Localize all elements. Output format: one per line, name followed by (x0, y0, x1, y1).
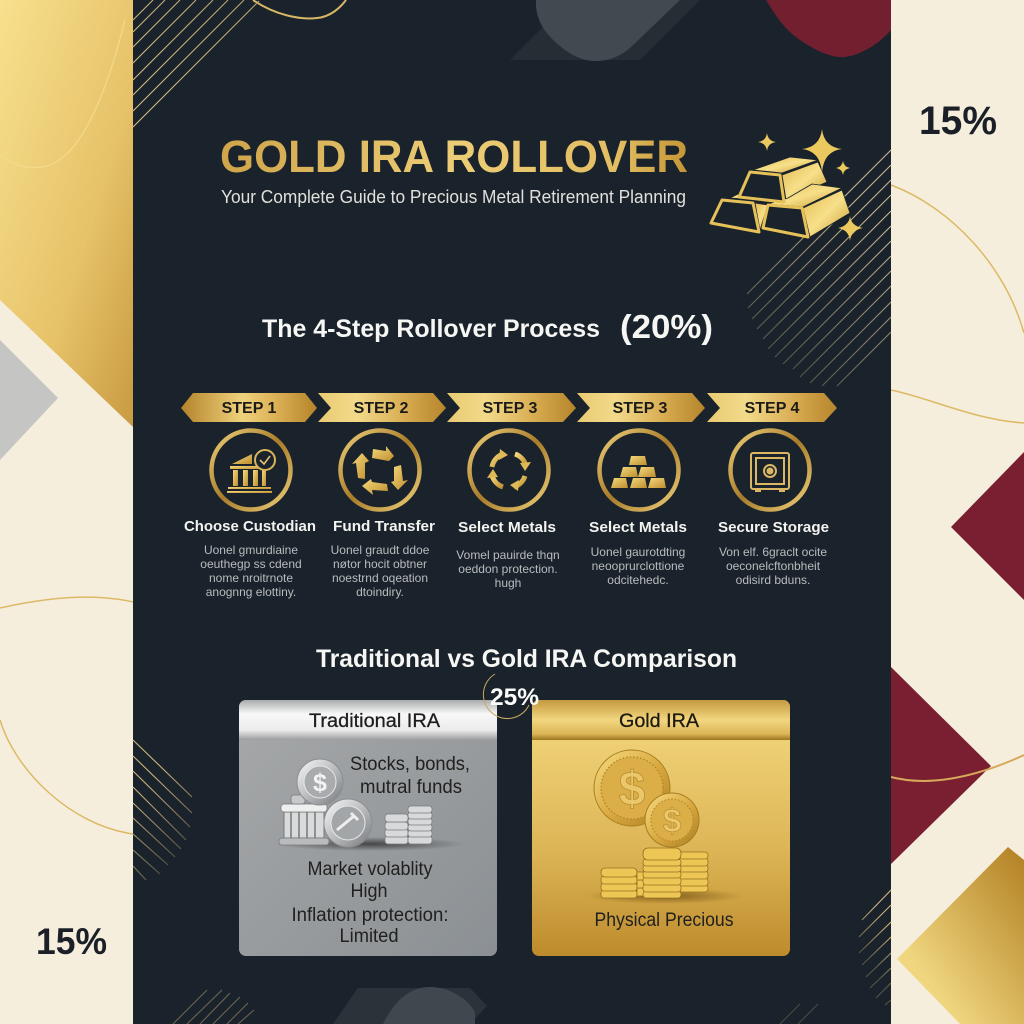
step 4 description: oeconelcftonbheit (726, 559, 821, 573)
step 3 title: Select Metals (458, 519, 556, 536)
step 1 description: anognng elottiny. (206, 585, 296, 599)
step 2 column (318, 393, 446, 599)
step 3 description: hugh (495, 576, 521, 590)
step 4 banner (707, 393, 837, 422)
step 1 description: nome nroitrnote (209, 571, 293, 585)
step 1 banner (181, 393, 317, 422)
step 3 banner (447, 393, 576, 422)
icon: bank with check (212, 430, 290, 510)
step 1 description: Uonel gmurdiaine (204, 543, 298, 557)
step 1 description (200, 543, 302, 599)
icon: transfer arrows (340, 430, 420, 510)
step 3b description (591, 545, 685, 587)
card text: volatility and inflation: Market volablity (308, 859, 433, 880)
percent label: top right 15%: 15% (919, 99, 997, 143)
card text: physical precious: Physical Precious (594, 910, 734, 931)
heading: comparison: Traditional vs Gold IRA Comparison (316, 645, 737, 673)
step 3b description: neooprurclottione (592, 559, 685, 573)
step 1 column (181, 393, 317, 599)
step 2 title: Fund Transfer (333, 518, 435, 535)
step 4 description: Von elf. 6graclt ocite (719, 545, 827, 559)
step 4 title: Secure Storage (718, 519, 829, 536)
title: GOLD IRA ROLLOVER (220, 131, 688, 182)
step 4 banner: STEP 4 (745, 400, 800, 417)
step 4 column (707, 393, 837, 587)
step 4 description (719, 545, 827, 587)
heading: rollover process (262, 308, 713, 345)
icon: silver coins and pillar (275, 759, 465, 851)
step 3b description: Uonel gaurotdting (591, 545, 685, 559)
step 3b banner: STEP 3 (613, 400, 668, 417)
step 1 description: oeuthegp ss cdend (200, 557, 302, 571)
icon: circular arrows (470, 430, 548, 510)
card text: volatility and inflation: Limited (340, 926, 398, 947)
step 3b description: odcitehedc. (607, 573, 669, 587)
icon: gold bars with sparkles (711, 129, 863, 241)
panel: right decorative side (891, 0, 1024, 1024)
icon: vault safe (730, 430, 810, 510)
heading: rollover process: The 4-Step Rollover Process (262, 315, 600, 343)
subtitle: Your Complete Guide to Precious Metal Retirement Planning (221, 187, 686, 207)
percent badge: 25% (483, 674, 539, 719)
step 3 description: oeddon protection. (458, 562, 558, 576)
step 2 description: dtoindiry. (356, 585, 404, 599)
percent label: bottom left 15%: 15% (36, 921, 107, 962)
step 3b banner (577, 393, 705, 422)
icon: gold coins and stacks: $ (619, 763, 646, 816)
icon: gold coins and stacks (587, 750, 743, 904)
panel: traditional IRA card (239, 700, 497, 956)
step 2 description: nøtor hocit obtner (333, 557, 427, 571)
card heading: gold IRA: Gold IRA (619, 711, 699, 732)
step 1 banner: STEP 1 (222, 400, 277, 417)
step 2 description: Uonel graudt ddoe (331, 543, 430, 557)
step 3b title: Select Metals (589, 519, 687, 536)
icon: silver coins and pillar: $ (313, 769, 327, 797)
step 4 description: odisird bduns. (736, 573, 810, 587)
card heading: traditional IRA: Traditional IRA (309, 711, 440, 732)
card text: assets (350, 754, 470, 798)
card text: volatility and inflation: Inflation protection: (292, 905, 448, 926)
step 2 banner: STEP 2 (354, 400, 409, 417)
step 3 banner: STEP 3 (483, 400, 538, 417)
percent badge: 25%: 25% (490, 684, 539, 711)
card text: assets: Stocks, bonds, (350, 754, 470, 775)
step 3 description: Vomel pauirde thqn (456, 548, 560, 562)
card text: volatility and inflation: High (350, 881, 388, 902)
step 2 description (331, 543, 430, 599)
heading: rollover process: (20%) (620, 308, 713, 345)
panel: left decorative side (0, 0, 133, 1024)
step 2 description: noestrnd oqeation (332, 571, 428, 585)
step 1 title: Choose Custodian (184, 518, 316, 535)
step 3 description (456, 548, 560, 590)
step 2 banner (318, 393, 446, 422)
step 3b column: select metals (577, 393, 705, 587)
icon: gold coins and stacks: $ (663, 802, 681, 839)
panel: dark centre background (133, 0, 891, 1024)
panel: gold IRA card (532, 700, 790, 956)
card text: assets: mutral funds (360, 777, 462, 798)
icon: gold bar pyramid (600, 430, 678, 510)
step 3 column: metals recycle (447, 393, 576, 590)
card text: volatility and inflation (292, 859, 448, 947)
